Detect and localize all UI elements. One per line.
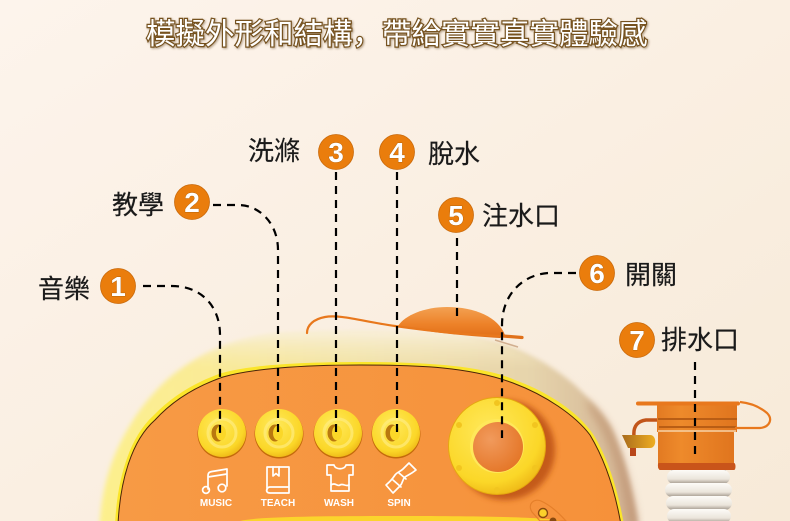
callout 4: 4 — [389, 137, 405, 168]
callout 1: 1 — [110, 271, 126, 302]
callout 5: 注水口 — [482, 201, 560, 231]
water inlet cover — [307, 307, 522, 347]
button: teach — [254, 409, 304, 458]
callout 7: 7 — [629, 325, 645, 356]
callout 4 — [380, 134, 480, 170]
callout 7: 排水口 — [661, 325, 739, 355]
yellow rim — [115, 362, 624, 521]
icon: wash: WASH — [324, 498, 354, 509]
machine outer shell — [99, 333, 639, 521]
callout 3: 3 — [328, 137, 344, 168]
icon: spin — [386, 463, 416, 509]
callout 1: 音樂 — [38, 274, 90, 304]
leader line 2 — [213, 205, 278, 436]
button: wash — [314, 409, 362, 458]
callout 2 — [112, 184, 210, 220]
leader line 4 — [396, 172, 398, 436]
callout 4: 脫水 — [428, 139, 480, 169]
lower yellow window — [240, 516, 565, 521]
orange control panel — [118, 365, 621, 521]
callout 3: 洗滌 — [248, 136, 300, 166]
button: spin — [372, 409, 420, 458]
callout 2: 教學 — [112, 190, 164, 220]
leader line 6 — [502, 273, 576, 438]
callout 3 — [248, 134, 354, 170]
power knob — [448, 398, 555, 500]
leader line 1 — [143, 286, 220, 436]
leader line 3 — [335, 172, 337, 436]
drain hose — [665, 469, 732, 521]
icon: teach: TEACH — [261, 498, 295, 509]
callout 6 — [580, 256, 677, 290]
callout 2: 2 — [184, 187, 200, 218]
callout 5 — [438, 198, 560, 232]
indicator light — [530, 500, 566, 521]
drain cap — [636, 402, 770, 470]
callout 1 — [38, 268, 136, 304]
callout 5: 5 — [448, 200, 464, 231]
product: toy washing machine — [99, 307, 770, 521]
icon: spin: SPIN — [387, 498, 411, 509]
icon: music — [200, 469, 232, 509]
callout 7 — [620, 322, 739, 358]
button: music — [198, 409, 246, 458]
callout 6: 6 — [589, 258, 605, 289]
side bracket — [622, 420, 660, 456]
icon: music: MUSIC — [200, 498, 232, 509]
leader line 7 — [694, 362, 696, 454]
title: 模擬外形和結構，帶給實實真實體驗感 — [146, 18, 648, 51]
callout 6: 開關 — [625, 260, 677, 290]
icon: wash — [324, 465, 354, 509]
icon: teach — [261, 467, 295, 509]
leader line 5 — [456, 238, 458, 316]
brown side shading — [585, 398, 639, 521]
